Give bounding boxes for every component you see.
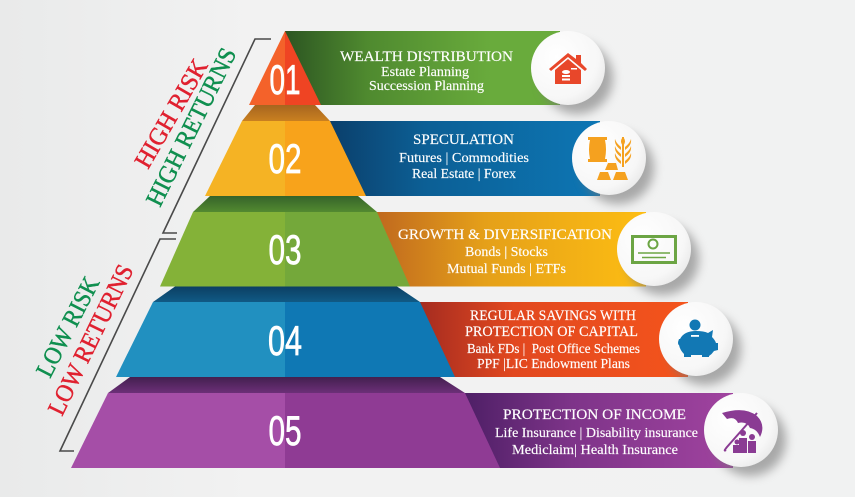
text block 5: Mediclaim| Health Insurance [512,443,678,458]
label: high risk: HIGH RISK [130,55,214,173]
pyramid tier 2 [205,105,366,196]
text block 1 [340,49,513,94]
text block 3: Bonds | Stocks [465,245,548,260]
text block 3: GROWTH & DIVERSIFICATION [398,227,612,243]
band 3: growth and diversification [377,212,646,286]
number 04: 04 [268,317,302,364]
band 2: speculation [330,121,600,196]
text block 4: PPF |LIC Endowment Plans [477,357,630,372]
text block 2: Futures | Commodities [399,151,529,166]
icon disc 4: piggy bank [659,302,741,385]
icon disc 3: banknote [617,212,699,295]
number 02: 02 [268,135,302,182]
text block 1: Succession Planning [369,79,484,94]
text block 5: PROTECTION OF INCOME [503,407,686,423]
bracket: high risk [163,39,271,233]
text block 1: Estate Planning [381,65,469,80]
text block 5: Life Insurance | Disability insurance [495,426,698,441]
band 4: regular savings [420,302,688,377]
text block 2: Real Estate | Forex [412,167,516,182]
band 5: protection of income [465,393,733,468]
pyramid tier 5 [71,377,500,468]
text block 1: WEALTH DISTRIBUTION [340,49,513,65]
bracket: low risk [60,239,176,451]
icon disc 1: house with coins [531,31,613,114]
label: low returns: LOW RETURNS [43,260,139,420]
label: low risk: LOW RISK [31,273,105,382]
number 05: 05 [268,407,302,454]
icon disc 2: barrel, wheat, gold [572,121,654,204]
band 1: wealth distribution [285,31,560,105]
icon disc 5: umbrella over family [704,393,786,476]
pyramid tier 1 [249,31,321,105]
number 03: 03 [268,226,302,273]
text block 4 [465,308,640,372]
label: high returns: HIGH RETURNS [141,44,242,211]
text block 3: Mutual Funds | ETFs [447,262,566,277]
text block 4: REGULAR SAVINGS WITH [470,308,636,324]
text block 5 [495,407,698,458]
pyramid tier 3 [160,196,410,286]
text block 2 [399,132,529,182]
pyramid tier 4 [116,286,455,377]
text block 4: PROTECTION OF CAPITAL [465,324,638,340]
text block 2: SPECULATION [413,132,514,148]
text block 4: Bank FDs | Post Office Schemes [467,342,640,357]
text block 3 [398,227,612,277]
number 01: 01 [270,56,300,103]
